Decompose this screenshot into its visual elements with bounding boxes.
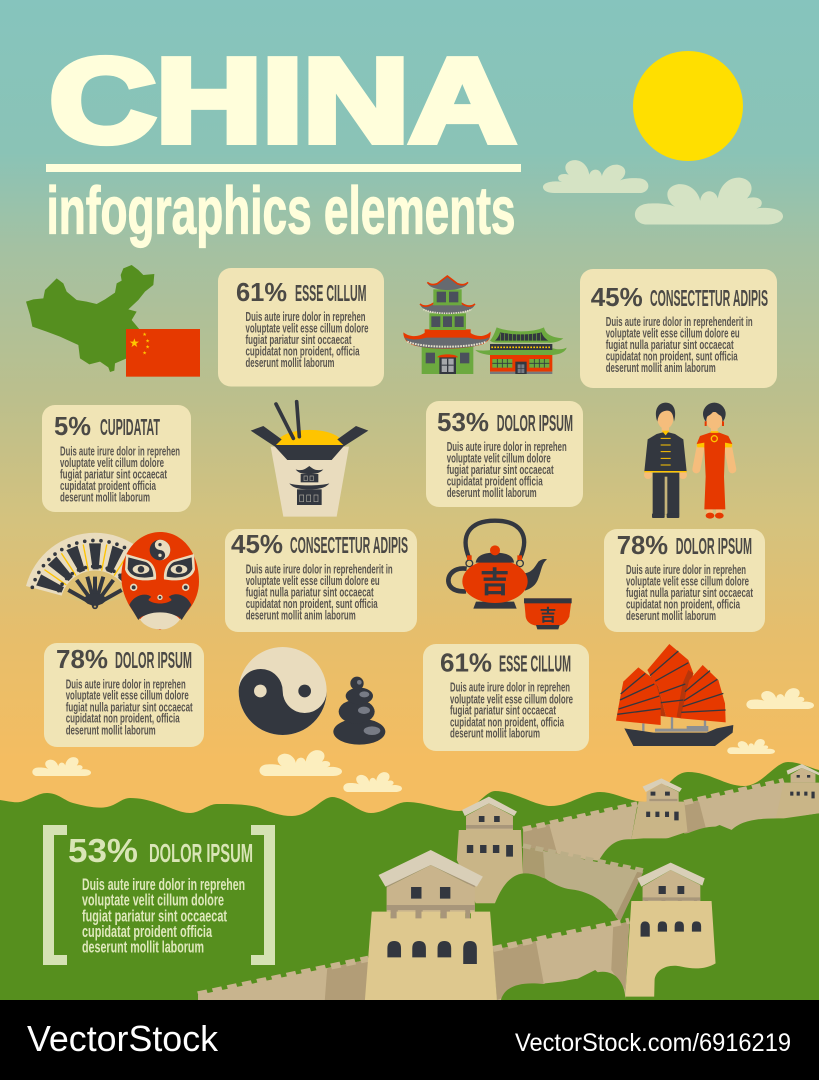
panel: 78% dolor ipsum right [604, 529, 765, 632]
panel: 45% consectetur adipis second: voluptate velit esse cillum dolore eu [246, 574, 380, 588]
panel: 5% cupidatat: 5% [54, 411, 91, 441]
panel: 53% dolor ipsum: DOLOR IPSUM [497, 410, 573, 436]
panel: 53% dolor ipsum: deserunt mollit laborum [447, 486, 537, 500]
panel: 78% dolor ipsum left: cupidatat non proident, officia [66, 712, 180, 726]
panel: 61% esse cillum lower [423, 644, 589, 751]
icon: china map and flag [26, 265, 200, 377]
low temple [475, 327, 567, 374]
foreground green hill [501, 972, 625, 1000]
yin yang [239, 647, 327, 735]
lower right wall [493, 921, 629, 1000]
cloud: right sky [746, 688, 814, 709]
upper wall left section [523, 804, 637, 862]
opera mask [121, 532, 199, 630]
footer brand: VectorStock [27, 1018, 219, 1059]
stacked stones [333, 677, 385, 745]
panel: 61% esse cillum: fugiat pariatur sint occaecat [246, 333, 352, 347]
icon: junk ship [616, 644, 733, 746]
panel: 78% dolor ipsum left: deserunt mollit laborum [66, 723, 156, 737]
china flag: ★ [142, 351, 147, 357]
panel: 78% dolor ipsum right: 78% [617, 530, 668, 560]
woman [696, 403, 732, 519]
panel: 78% dolor ipsum right: Duis aute irure dolor in reprehen [626, 563, 746, 577]
footer url: VectorStock.com/6916219 [515, 1029, 791, 1057]
panel: 78% dolor ipsum left: voluptate velit esse cillum dolore [66, 689, 189, 703]
panel: 53% dolor ipsum: 53% [437, 407, 489, 437]
panel: 5% cupidatat [42, 405, 191, 512]
cup: 吉 [540, 602, 556, 626]
panel: 53% dolor ipsum: voluptate velit cillum dolore [447, 451, 551, 465]
upper wall right section [684, 781, 784, 833]
panel: 53% dolor ipsum: cupidatat proident officia [447, 474, 543, 488]
panel: green 53% callout: voluptate velit cillum dolore [82, 892, 224, 910]
panel: 5% cupidatat: voluptate velit cillum dolore [60, 456, 164, 470]
panel: 53% dolor ipsum [426, 401, 583, 507]
panel: 61% esse cillum: Duis aute irure dolor in reprehen [246, 310, 366, 324]
panel: 78% dolor ipsum left: Duis aute irure dolor in reprehen [66, 677, 186, 691]
china flag: ★ [142, 332, 147, 338]
panel: 78% dolor ipsum right: voluptate velit esse cillum dolore [626, 575, 749, 589]
panel: green 53% callout [43, 825, 275, 965]
footer bar [0, 1000, 819, 1080]
china flag: ★ [145, 338, 150, 344]
panel: 78% dolor ipsum left: fugiat nulla pariatur sint occaecat [66, 700, 193, 714]
panel: green 53% callout: 53% [68, 832, 138, 869]
panel: 78% dolor ipsum right: deserunt mollit laborum [626, 609, 716, 623]
second tower [457, 797, 523, 903]
panel: 53% dolor ipsum: Duis aute irure dolor in reprehen [447, 440, 567, 454]
main tower [365, 850, 497, 1000]
panel: 61% esse cillum: ESSE CILLUM [295, 280, 366, 306]
icon: noodle box [251, 402, 368, 517]
descending wall [523, 846, 643, 922]
great wall [198, 764, 819, 1000]
panel: 61% esse cillum lower: voluptate velit esse cillum dolore [450, 692, 573, 706]
title: CHINA [50, 34, 516, 168]
panel: 61% esse cillum lower: 61% [440, 648, 492, 678]
cloud: middle small [343, 772, 402, 792]
panel: 61% esse cillum lower: fugiat pariatur sint occaecat [450, 704, 557, 718]
icon: teapot and cup [448, 521, 572, 629]
green hills [0, 762, 819, 1000]
panel: 45% consectetur adipis: cupidatat non proident, sunt officia [606, 349, 738, 363]
panel: 5% cupidatat: cupidatat proident officia [60, 479, 157, 493]
right bracket [251, 825, 275, 965]
panel: 5% cupidatat: Duis aute irure dolor in reprehen [60, 445, 180, 459]
panel: 5% cupidatat: CUPIDATAT [100, 414, 160, 440]
panel: 45% consectetur adipis: 45% [591, 282, 643, 312]
panel: 45% consectetur adipis: fugiat nulla pariatur sint occaecat [606, 338, 734, 352]
tiered pagoda [403, 276, 491, 374]
panel: green 53% callout: Duis aute irure dolor in reprehen [82, 876, 245, 894]
panel: 45% consectetur adipis second: cupidatat non proident, sunt officia [246, 597, 378, 611]
panel: 78% dolor ipsum left [44, 643, 204, 747]
panel: 45% consectetur adipis second: deserunt mollit anim laborum [246, 609, 356, 623]
panel: 61% esse cillum lower: deserunt mollit laborum [450, 727, 540, 741]
panel: 45% consectetur adipis: deserunt mollit anim laborum [606, 361, 716, 375]
left bracket [43, 825, 67, 965]
folding fan [26, 533, 164, 608]
sun [633, 51, 743, 161]
panel: 78% dolor ipsum left: 78% [56, 644, 108, 674]
china map [26, 265, 154, 372]
panel: 61% esse cillum: voluptate velit esse cillum dolore [246, 322, 369, 336]
middle far tower [631, 778, 687, 839]
cloud: middle large [259, 750, 342, 776]
panel: 5% cupidatat: deserunt mollit laborum [60, 491, 150, 505]
left lower wall [198, 959, 369, 1000]
panel: green 53% callout: deserunt mollit laborum [82, 939, 204, 957]
panel: 53% dolor ipsum: fugiat pariatur sint occaecat [447, 463, 554, 477]
icon: couple in traditional dress [644, 403, 732, 519]
icon: pagoda and temple [403, 276, 567, 374]
panel: 45% consectetur adipis: voluptate velit esse cillum dolore eu [606, 326, 740, 340]
icon: yin yang and stones [239, 647, 385, 745]
cloud: near ship [727, 739, 775, 754]
panel: 45% consectetur adipis second: 45% [231, 529, 283, 559]
panel: 61% esse cillum lower: Duis aute irure dolor in reprehen [450, 681, 570, 695]
panel: 78% dolor ipsum left: DOLOR IPSUM [115, 647, 192, 673]
panel: green 53% callout: DOLOR IPSUM [149, 838, 253, 868]
green hill centre [475, 873, 627, 983]
panel: 61% esse cillum: deserunt mollit laborum [246, 356, 334, 370]
subtitle: infographics elements [46, 174, 516, 248]
china flag [126, 329, 200, 377]
cloud: far left [32, 757, 91, 776]
cloud: top left [543, 160, 648, 193]
panel: 61% esse cillum lower: cupidatat non proident, officia [450, 715, 565, 729]
panel: green 53% callout: fugiat pariatur sint occaecat [82, 907, 227, 925]
icon: folding fan and opera mask [26, 532, 199, 630]
china flag: ★ [129, 336, 140, 350]
panel: 61% esse cillum [218, 268, 384, 386]
panel: 45% consectetur adipis [580, 269, 777, 388]
panel: 78% dolor ipsum right: cupidatat non proident, officia [626, 598, 741, 612]
panel: 61% esse cillum: cupidatat non proident, officia [246, 344, 360, 358]
cloud: top right [635, 178, 783, 224]
front right tower [625, 863, 716, 997]
hill patch in front of upper wall [599, 813, 819, 870]
panel: green 53% callout: cupidatat proident officia [82, 923, 213, 941]
panel: 45% consectetur adipis second: Duis aute irure dolor in reprehenderit in [246, 563, 393, 577]
teapot: 吉 [480, 560, 509, 602]
man [644, 403, 687, 518]
panel: 5% cupidatat: fugiat pariatur sint occaecat [60, 468, 168, 482]
panel: 45% consectetur adipis second: fugiat nulla pariatur sint occaecat [246, 586, 374, 600]
panel: 61% esse cillum: 61% [236, 277, 287, 307]
panel: 61% esse cillum lower: ESSE CILLUM [499, 651, 571, 677]
title underline [46, 164, 521, 172]
panel: 45% consectetur adipis second [225, 529, 417, 632]
text: CONSECTETUR ADIPIS [290, 532, 408, 558]
far tower [775, 764, 819, 819]
china flag: ★ [145, 344, 150, 350]
